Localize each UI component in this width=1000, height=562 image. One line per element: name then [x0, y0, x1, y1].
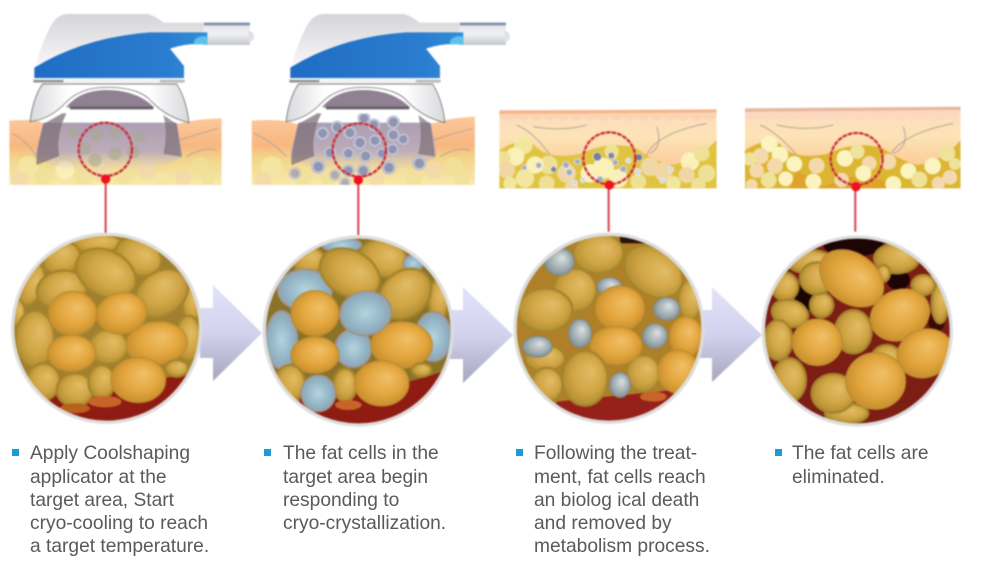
- caption 2: responding to: [283, 490, 399, 511]
- stage 4 skin section: [743, 107, 961, 232]
- caption 1: Apply Coolshaping: [30, 443, 190, 464]
- caption 3: metabolism process.: [534, 536, 710, 557]
- connector 3: [605, 180, 614, 232]
- caption 1: [12, 443, 209, 557]
- connector 1: [101, 174, 110, 233]
- caption 3: ment, fat cells reach: [534, 467, 706, 488]
- skin section 1: [9, 110, 222, 188]
- caption 4: The fat cells are: [792, 443, 929, 464]
- stage 2 applicator and skin: [252, 14, 510, 235]
- bullet 3: [516, 449, 523, 456]
- caption 3: and removed by: [534, 513, 672, 534]
- stage 1 applicator and skin: [9, 14, 254, 233]
- arrow 3: [700, 287, 762, 382]
- connector 2: [354, 175, 363, 235]
- caption 4: eliminated.: [792, 467, 885, 488]
- caption 1: applicator at the: [30, 467, 167, 488]
- target ring 3: [583, 132, 635, 184]
- magnified circle 3: [513, 232, 710, 428]
- caption 3: Following the treat-: [534, 443, 697, 464]
- bullet 2: [264, 449, 271, 456]
- caption 1: cryo-cooling to reach: [30, 513, 208, 534]
- caption 1: a target temperature.: [30, 536, 209, 557]
- arrow 2: [450, 287, 513, 383]
- target ring 1: [79, 123, 132, 176]
- magnified circle 4: [762, 233, 960, 432]
- arrow 1: [200, 285, 262, 381]
- bullet 1: [12, 449, 19, 456]
- caption 2: The fat cells in the: [283, 443, 439, 464]
- target ring 2: [333, 123, 386, 177]
- caption 2: target area begin: [283, 467, 428, 488]
- stage 3 skin section: [496, 109, 717, 232]
- caption 2: [264, 443, 446, 534]
- target ring 4: [831, 133, 883, 185]
- magnified circle 1: [10, 230, 207, 428]
- caption 4: [775, 443, 929, 488]
- bullet 4: [775, 449, 782, 456]
- connector 4: [851, 182, 861, 232]
- skin section 2: [252, 110, 475, 188]
- caption 1: target area, Start: [30, 490, 175, 511]
- image area: [9, 14, 961, 432]
- caption 3: an biolog ical death: [534, 490, 699, 511]
- caption 3: [516, 443, 710, 557]
- caption 2: cryo-crystallization.: [283, 513, 446, 534]
- magnified circle 2: [263, 234, 460, 432]
